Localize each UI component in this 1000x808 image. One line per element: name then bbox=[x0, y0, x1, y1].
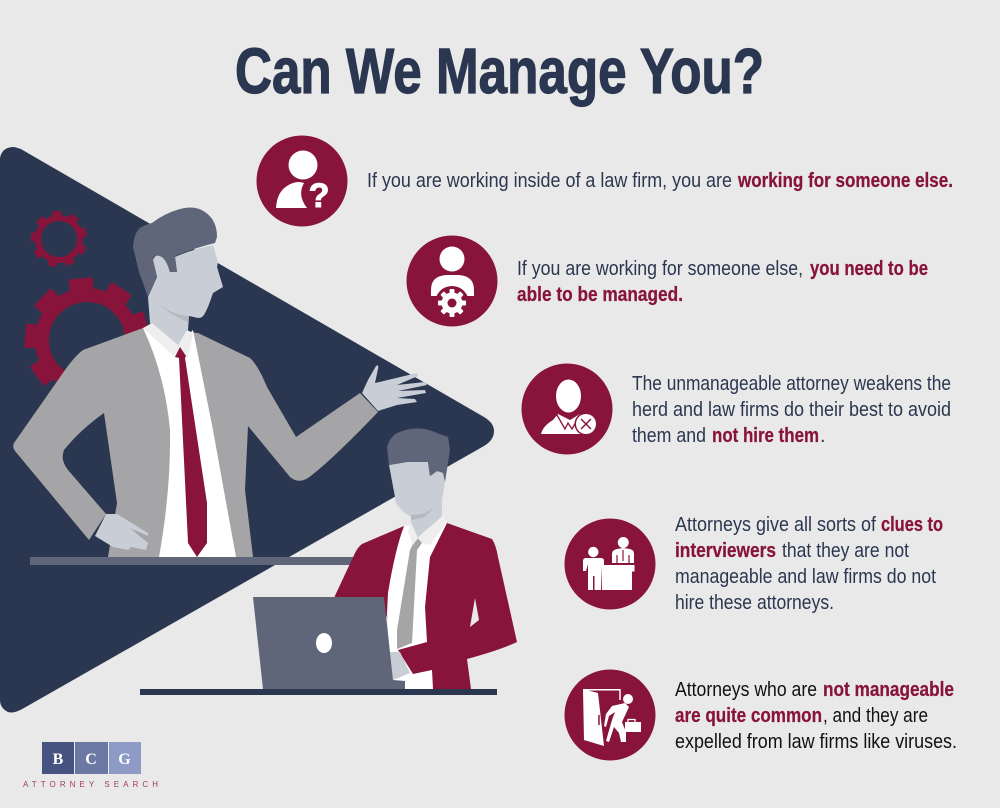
text: statement 2: you need to be bbox=[810, 258, 928, 280]
laptop bbox=[253, 597, 405, 689]
text: statement 1: working for someone else. bbox=[737, 170, 953, 192]
text: statement 4: that they are not bbox=[782, 540, 909, 562]
text: statement 3: herd and law firms do their best to avoid bbox=[632, 399, 951, 421]
icon: person with question mark bbox=[256, 136, 348, 226]
text: statement 4: clues to bbox=[881, 514, 943, 536]
text: statement 5: , and they are bbox=[823, 705, 928, 727]
icon: small gear bbox=[31, 211, 87, 267]
illustration: seated man in burgundy suit bbox=[333, 428, 517, 689]
text: statement 5: expelled from law firms like viruses. bbox=[675, 731, 957, 753]
text: statement 5: not manageable bbox=[823, 679, 954, 701]
icon: person with gear bbox=[406, 236, 498, 326]
logo: BCG Attorney Search: C bbox=[85, 751, 97, 768]
icon: large gear bbox=[24, 277, 150, 403]
desk under laptop bbox=[140, 689, 497, 695]
text: statement 2: able to be managed. bbox=[517, 284, 683, 306]
icon: person carrying a briefcase out a door bbox=[564, 670, 656, 760]
text: statement 3: not hire them bbox=[712, 425, 819, 447]
text: statement 1 bbox=[367, 170, 953, 192]
icon: person with question mark: ? bbox=[309, 177, 329, 215]
text: statement 3: them and bbox=[632, 425, 706, 447]
text: statement 3: . bbox=[820, 425, 826, 447]
text: statement 2 bbox=[517, 258, 928, 306]
text: statement 5: are quite common bbox=[675, 705, 822, 727]
text: statement 4: manageable and law firms do not bbox=[675, 566, 936, 588]
text: statement 4: Attorneys give all sorts of bbox=[675, 514, 876, 536]
text: statement 2: If you are working for someone else, bbox=[517, 258, 803, 280]
icon: interview at a desk bbox=[564, 518, 656, 610]
logo: BCG Attorney Search: G bbox=[118, 751, 131, 768]
text: statement 5 bbox=[675, 679, 957, 753]
text: statement 3 bbox=[632, 373, 951, 447]
title: Can We Manage You? bbox=[235, 35, 764, 107]
logo: BCG Attorney Search bbox=[23, 742, 158, 789]
icon: rejected person bbox=[522, 364, 612, 454]
illustration: standing man in grey suit bbox=[13, 208, 427, 557]
background triangle bbox=[0, 147, 494, 712]
text: statement 3: The unmanageable attorney weakens the bbox=[632, 373, 951, 395]
text: statement 4 bbox=[675, 514, 943, 614]
logo: BCG Attorney Search: ATTORNEY SEARCH bbox=[23, 780, 158, 789]
text: statement 4: interviewers bbox=[675, 540, 776, 562]
desk behind standing man bbox=[30, 557, 355, 565]
logo: BCG Attorney Search: B bbox=[53, 751, 64, 768]
text: statement 1: If you are working inside of a law firm, you are bbox=[367, 170, 732, 192]
text: statement 4: hire these attorneys. bbox=[675, 592, 834, 614]
text: statement 5: Attorneys who are bbox=[675, 679, 817, 701]
